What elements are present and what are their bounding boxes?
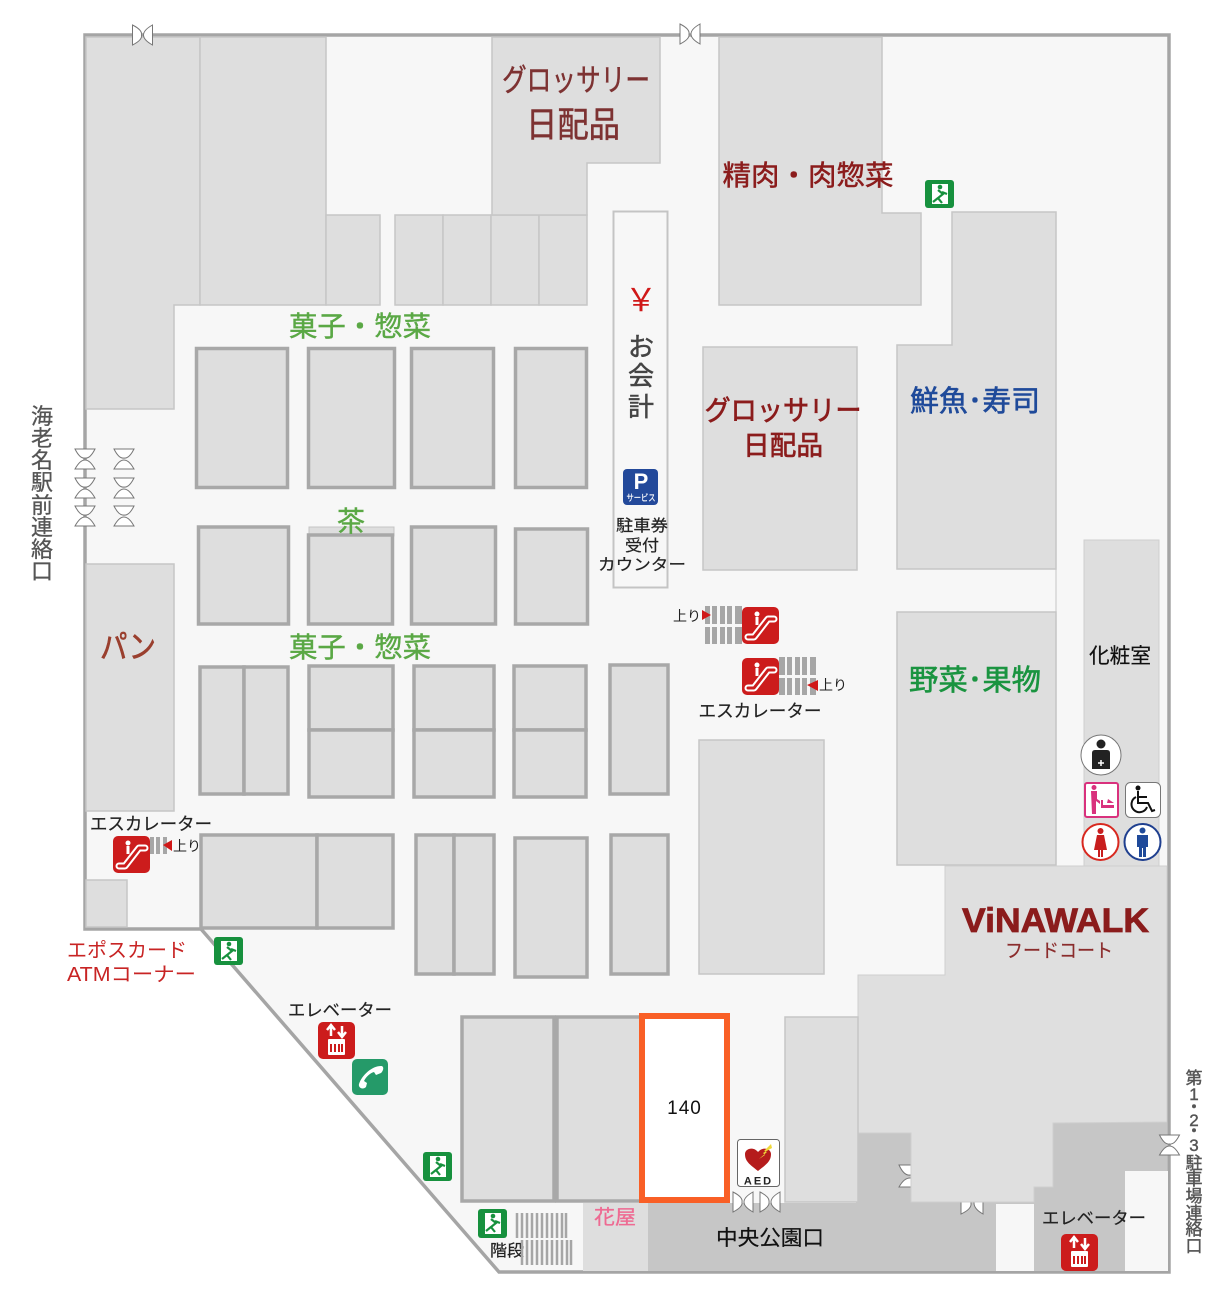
block: small store <box>326 215 380 305</box>
icon: escalator centre lower <box>742 658 779 695</box>
label: grocery centre: 日配品 <box>743 431 823 461</box>
highlighted shop 140: 140 <box>667 1098 702 1119</box>
label: food court: フードコート <box>1005 941 1113 962</box>
icon: women <box>1082 824 1118 860</box>
icon: elevator west <box>318 1022 355 1059</box>
label: sweets top: 菓子・惣菜 <box>289 311 431 342</box>
block: large lower centre <box>699 740 824 974</box>
block: food court <box>858 866 1167 1202</box>
label: checkout <box>628 332 654 422</box>
block: second tall store <box>200 37 326 305</box>
label: up west: 上り <box>173 838 201 854</box>
label: up lower: 上り <box>819 677 847 693</box>
highlighted shop 140 <box>642 1016 727 1200</box>
block: grocery centre <box>703 347 857 570</box>
entrance corridor <box>648 1122 1167 1271</box>
label: Ebina station link: 海老名駅前連絡口 <box>31 404 53 584</box>
label: checkout: 会 <box>628 361 654 391</box>
row 1 shops <box>196 348 586 488</box>
label: grocery centre: グロッサリー <box>704 395 862 426</box>
icon: escalator west <box>113 836 150 873</box>
arrow: lower <box>807 680 818 691</box>
label: elevator east: エレベーター <box>1042 1209 1146 1228</box>
label: parking counter: 駐車券 <box>616 517 668 535</box>
row 4 shops <box>201 835 668 977</box>
row 2 shops <box>198 527 588 624</box>
block: grocery top <box>492 37 660 215</box>
label: checkout: お <box>628 332 654 362</box>
doors: central park entrance <box>733 1192 780 1212</box>
tea strip <box>309 527 394 536</box>
icon: exit stairs <box>478 1209 507 1238</box>
icon: telephone <box>352 1059 388 1095</box>
corridor open area right <box>1125 1171 1168 1271</box>
door: lower corridor <box>961 1192 983 1214</box>
label: up upper: 上り <box>673 608 701 624</box>
icon: exit south <box>423 1152 452 1181</box>
label: meat: 精肉・肉惣菜 <box>722 160 894 191</box>
door: inner corridor <box>899 1165 921 1187</box>
icon: first aid person <box>1081 735 1121 775</box>
wall line <box>1056 569 1084 866</box>
block: store beside food court <box>785 1017 858 1202</box>
stairs: west escalator <box>150 837 167 854</box>
label: ATM <box>67 939 196 986</box>
label: checkout: 計 <box>628 392 654 422</box>
label: sweets lower: 菓子・惣菜 <box>289 632 431 663</box>
doors: west entrance <box>75 449 134 526</box>
block: ATM <box>86 880 127 927</box>
label: parking link: 第1・2・3駐車場連絡口 <box>1186 1069 1202 1256</box>
block: vegetables <box>897 612 1056 865</box>
label: escalator west: エスカレーター <box>90 814 212 834</box>
label: vegetables: 野菜･果物 <box>909 664 1041 697</box>
label: ATM: エポスカード <box>67 939 187 962</box>
block: four narrow stores <box>395 215 587 305</box>
label: tea: 茶 <box>337 506 365 537</box>
label: florist: 花屋 <box>594 1206 636 1229</box>
icon: exit north <box>925 180 954 208</box>
door: top centre <box>680 24 700 44</box>
block: left tall store <box>86 37 200 409</box>
label: VINAWALK: ViNAWALK <box>962 902 1149 940</box>
stairs: bottom lower <box>522 1240 571 1265</box>
door: east <box>1160 1135 1180 1155</box>
icon: exit west <box>214 937 243 965</box>
door: top left <box>132 25 152 45</box>
stairs: bottom upper <box>517 1213 566 1238</box>
icon: AED <box>738 1140 780 1188</box>
label: central park entrance: 中央公園口 <box>716 1227 824 1250</box>
label: parking counter: 受付 <box>625 537 659 555</box>
label: stairs: 階段 <box>490 1242 524 1260</box>
arrow: upper <box>702 610 711 620</box>
block: fish <box>897 212 1056 569</box>
corridor open area left <box>996 1204 1034 1271</box>
label: grocery top: 日配品 <box>526 106 620 145</box>
row 3 shops <box>200 665 668 797</box>
icon: escalator centre upper <box>742 607 779 644</box>
block: bakery <box>86 564 174 811</box>
icon: elevator east <box>1061 1234 1098 1271</box>
label: ATM: ATMコーナー <box>67 964 196 986</box>
icon: parking service: P <box>634 469 648 494</box>
icon: wheelchair <box>1126 782 1160 818</box>
label: parking counter: カウンター <box>598 556 686 574</box>
label: escalator centre: エスカレーター <box>698 701 822 721</box>
label: grocery centre <box>704 395 862 461</box>
icon: parking service: サービス <box>626 493 656 503</box>
block: checkout <box>614 212 668 588</box>
block: meat <box>719 37 921 305</box>
icon: men <box>1124 824 1160 860</box>
label: yen: ￥ <box>625 282 657 318</box>
icon: parking service <box>623 469 658 505</box>
block: flower shop <box>583 1203 648 1271</box>
label: elevator west: エレベーター <box>288 1001 392 1020</box>
label: grocery top: グロッサリー <box>502 63 650 98</box>
label: bread: パン <box>100 629 156 665</box>
block: powder room <box>1084 540 1159 866</box>
icon: AED: AED <box>744 1176 773 1188</box>
label: parking counter <box>598 517 686 574</box>
stairs: centre escalator down <box>779 657 816 695</box>
icon: baby changing <box>1085 783 1118 817</box>
stairs: centre escalator up <box>705 606 742 644</box>
label: powder room: 化粧室 <box>1089 645 1151 668</box>
bottom shops <box>462 1017 641 1201</box>
label: grocery top <box>502 63 650 145</box>
arrow: west <box>163 840 172 851</box>
label: fish: 鮮魚･寿司 <box>910 385 1040 418</box>
